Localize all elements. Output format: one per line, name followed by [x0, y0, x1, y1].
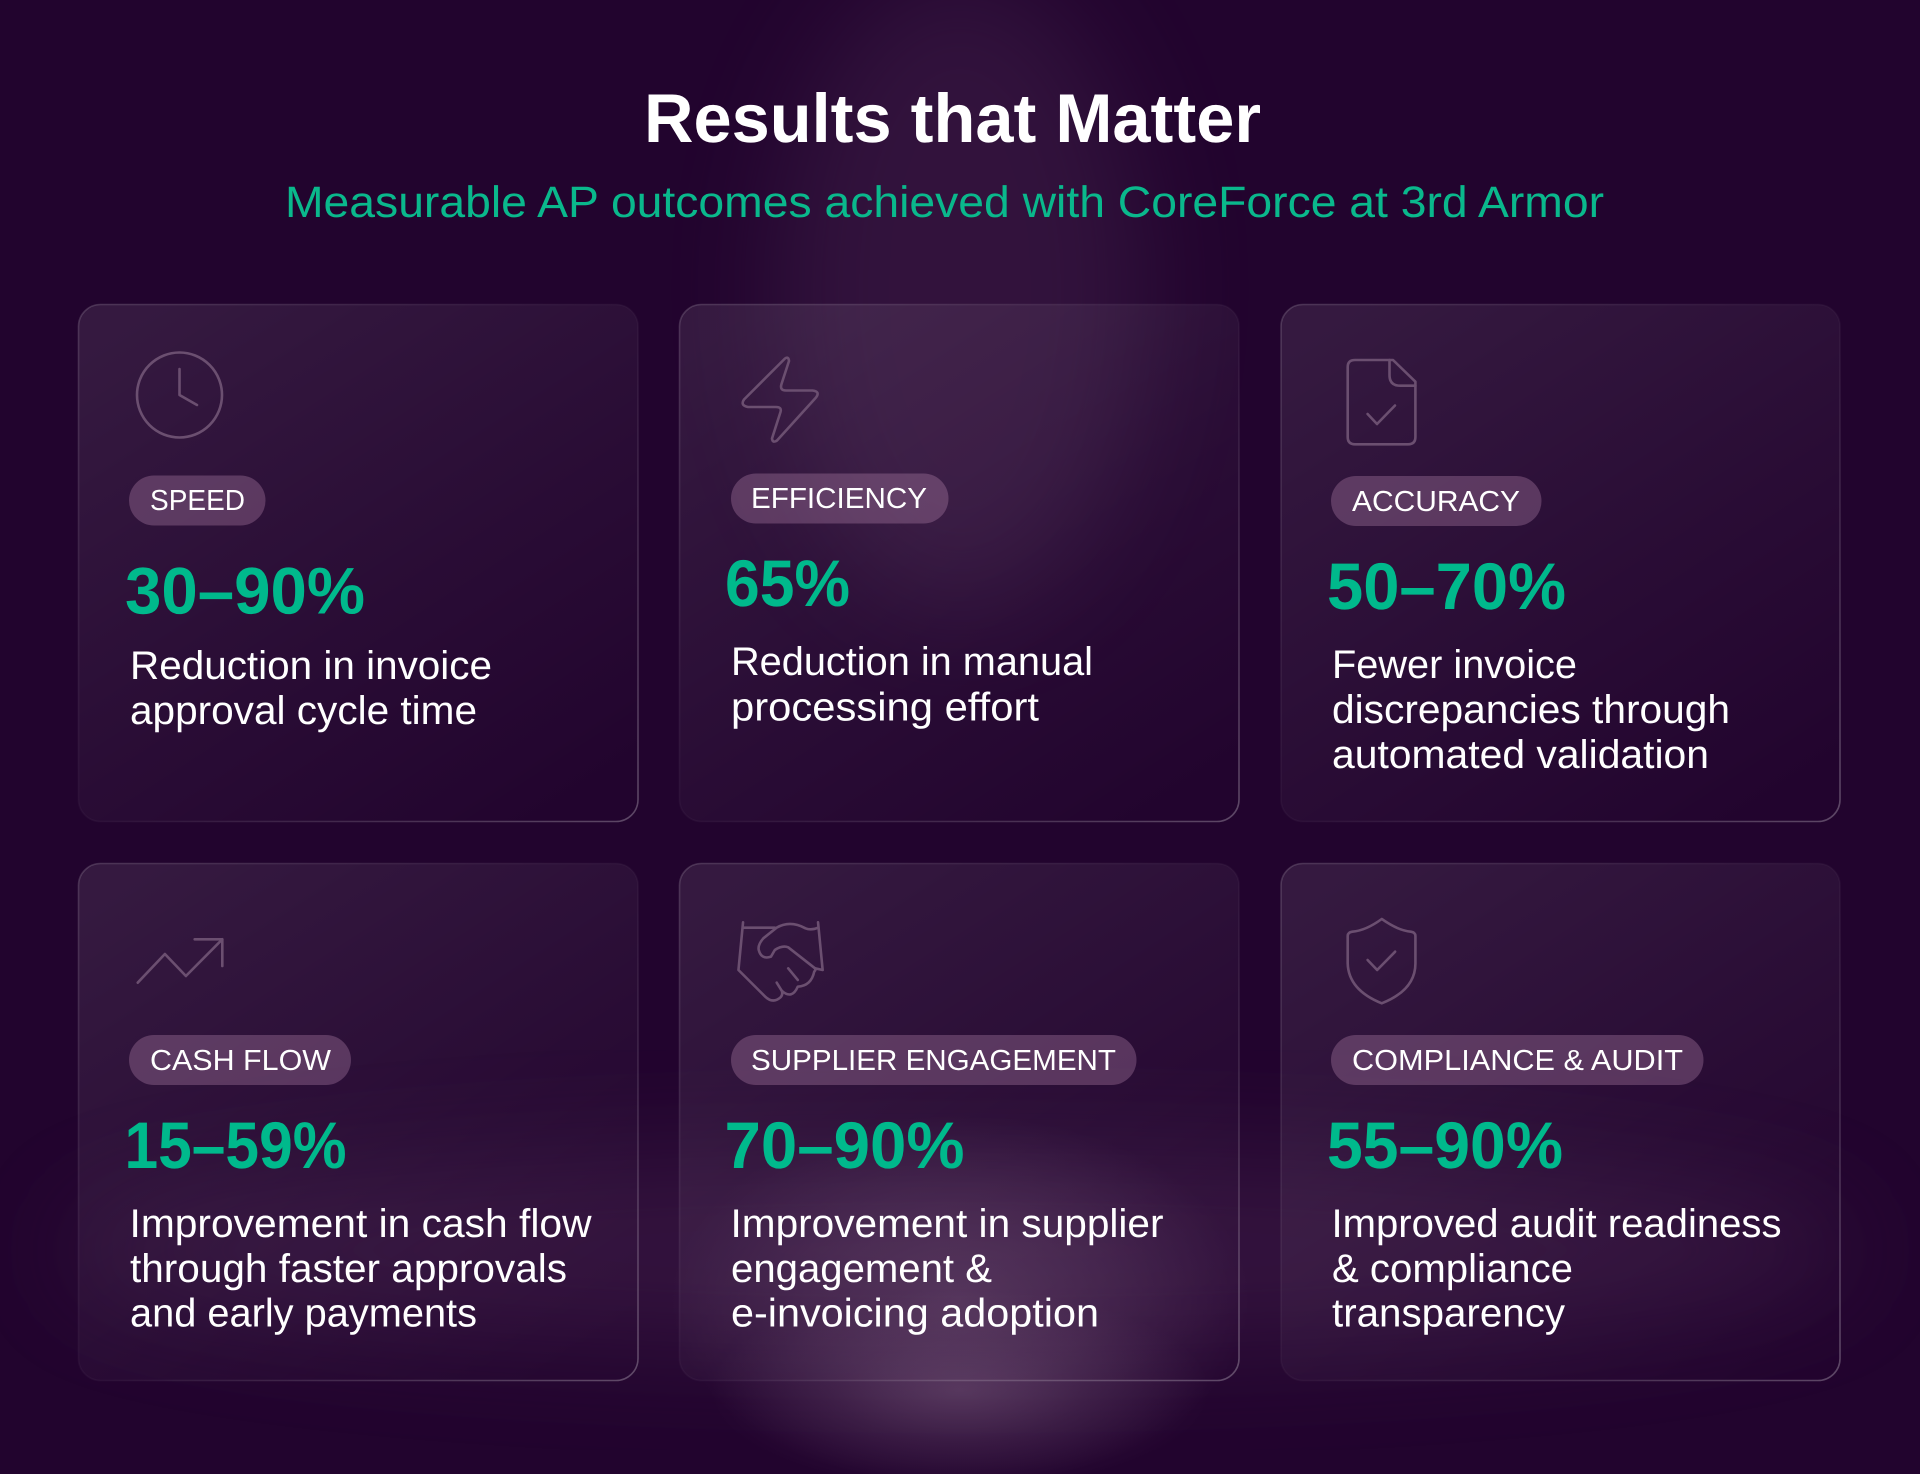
description: efficiency: processing effort: [731, 686, 1039, 730]
tag: accuracy: [1331, 476, 1542, 526]
description: accuracy: Fewer invoice: [1332, 643, 1577, 687]
description: speed: Reduction in invoice: [130, 644, 492, 688]
icon: lightning bolt: [743, 358, 818, 442]
panel: compliance and audit: [1281, 864, 1840, 1380]
description: compliance and audit: & compliance: [1332, 1247, 1573, 1291]
metric: 70–90%: 70–90%: [724, 1108, 964, 1182]
tag: speed: [129, 476, 266, 526]
panel: cash flow: [78, 864, 638, 1380]
tag: cash flow: CASH FLOW: [150, 1045, 332, 1077]
description: compliance and audit: Improved audit readiness: [1332, 1202, 1782, 1246]
tag: accuracy: ACCURACY: [1352, 486, 1520, 518]
metric: 50–70%: 50–70%: [1327, 549, 1566, 623]
description: accuracy: discrepancies through: [1332, 688, 1730, 732]
icon: clock: [137, 352, 222, 438]
description: supplier engagement: engagement &: [731, 1247, 992, 1291]
icon: document check: [1348, 360, 1415, 444]
panel: supplier engagement: [680, 864, 1239, 1380]
description: cash flow: Improvement in cash flow: [130, 1202, 592, 1246]
description: compliance and audit: [1332, 1202, 1782, 1336]
tag: cash flow: [129, 1035, 351, 1085]
description: accuracy: automated validation: [1332, 733, 1709, 777]
description: cash flow: [130, 1202, 592, 1336]
metric: 30–90%: 30–90%: [125, 554, 365, 628]
subtitle: Measurable AP outcomes achieved with CoreForce at 3rd Armor: [285, 178, 1604, 227]
metric: 65%: 65%: [725, 546, 850, 620]
tag: compliance and audit: COMPLIANCE & AUDIT: [1352, 1045, 1683, 1077]
description: speed: approval cycle time: [130, 689, 477, 733]
tag: speed: SPEED: [150, 485, 245, 517]
panel: accuracy: [1281, 304, 1840, 822]
description: efficiency: [731, 640, 1093, 730]
metric: 15–59%: 15–59%: [124, 1108, 346, 1182]
tag: compliance and audit: [1331, 1035, 1704, 1085]
tag: supplier engagement: SUPPLIER ENGAGEMENT: [751, 1045, 1116, 1077]
tag: supplier engagement: [731, 1035, 1136, 1085]
metric: 55–90%: 55–90%: [1327, 1108, 1563, 1182]
tag: efficiency: [731, 474, 948, 524]
panel: efficiency: [680, 304, 1239, 822]
tag: efficiency: EFFICIENCY: [751, 483, 927, 515]
description: cash flow: and early payments: [130, 1292, 477, 1336]
description: accuracy: [1332, 643, 1730, 777]
description: supplier engagement: e-invoicing adoption: [731, 1292, 1099, 1336]
icon: handshake: [738, 922, 823, 1000]
description: supplier engagement: Improvement in supplier: [730, 1202, 1164, 1246]
description: cash flow: through faster approvals: [130, 1247, 567, 1291]
panel: speed: [78, 304, 638, 822]
icon: shield check: [1348, 919, 1415, 1003]
title: Results that Matter: [644, 80, 1261, 157]
description: compliance and audit: transparency: [1332, 1292, 1565, 1336]
description: efficiency: Reduction in manual: [731, 640, 1093, 684]
description: supplier engagement: [730, 1202, 1164, 1336]
description: speed: [130, 644, 492, 733]
icon: trend arrow: [138, 939, 222, 983]
